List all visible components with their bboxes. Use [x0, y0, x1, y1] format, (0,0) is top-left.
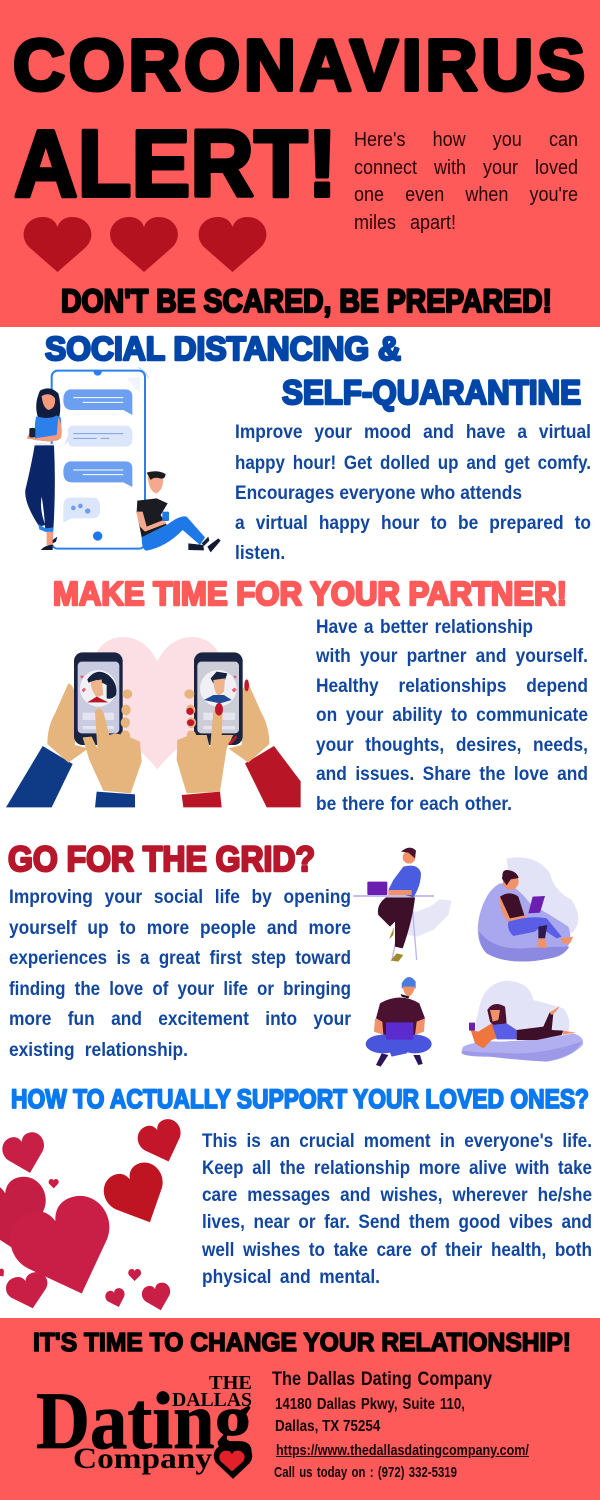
text: contact details: Dallas, TX 75254	[275, 1418, 380, 1434]
text: support body: well wishes to take care of their health, both	[202, 1239, 592, 1261]
heading: don't be scared: DON'T BE SCARED, BE PREPARED!	[61, 283, 552, 319]
text: social distancing body: a virtual happy hour to be prepared to	[235, 512, 591, 534]
text: social distancing body: Improve your mood and have a virtual	[235, 421, 591, 443]
text: contact details: The Dallas Dating Company	[272, 1369, 492, 1390]
text: contact details	[272, 1369, 529, 1481]
text: partner body: your thoughts, desires, needs,	[316, 734, 588, 756]
panel: make time for your partner	[6, 575, 588, 815]
text: intro: Here's how you can	[354, 129, 578, 151]
heading: change your relationship: IT'S TIME TO CHANGE YOUR RELATIONSHIP!	[33, 1329, 571, 1357]
illustration: hands holding phones	[6, 637, 301, 807]
text: grid body: existing relationship.	[9, 1039, 188, 1061]
icon: three hearts	[24, 217, 266, 272]
illustration: floating hearts	[0, 1116, 189, 1314]
text: grid body: finding the love of your life or bringing	[9, 978, 351, 1000]
text: partner body: on your ability to communicate	[316, 704, 588, 726]
text: partner body: with your partner and yourself.	[316, 645, 588, 667]
text: contact details: https://www.thedallasdatingcompany.com/	[276, 1442, 529, 1459]
text: partner body: Have a better relationship	[316, 616, 533, 638]
text: support body: physical and mental.	[202, 1266, 380, 1288]
logo: the dallas dating company: DALLAS	[172, 1389, 252, 1411]
panel: header	[0, 0, 600, 327]
text: social distancing body: Encourages everyone who attends	[235, 482, 522, 504]
title: coronavirus: CORONAVIRUS	[13, 26, 585, 106]
text: contact details: Call us today on : (972) 332-5319	[274, 1464, 457, 1481]
text: partner body: be there for each other.	[316, 793, 512, 815]
text: support body: lives, near or far. Send them good vibes and	[202, 1211, 592, 1233]
heading: make time: MAKE TIME FOR YOUR PARTNER!	[53, 575, 567, 612]
text: support body: Keep all the relationship more alive with take	[202, 1157, 592, 1179]
panel: go for the grid	[8, 839, 583, 1067]
panel: support your loved ones	[0, 1084, 592, 1310]
logo: the dallas dating company: Company	[73, 1442, 212, 1475]
text: support body: care messages and wishes, wherever he/she	[202, 1184, 592, 1206]
illustration: four people on devices	[353, 848, 583, 1067]
panel: social distancing	[25, 330, 591, 564]
text: intro: one even when you're	[354, 184, 578, 206]
text: social distancing body	[235, 421, 591, 564]
text: contact details: 14180 Dallas Pkwy, Suite 110,	[275, 1396, 465, 1412]
text: intro: miles apart!	[354, 212, 456, 234]
text: grid body	[9, 886, 351, 1061]
panel: footer	[0, 1318, 600, 1500]
illustration: phone with people chatting	[25, 367, 221, 552]
text: partner body: and issues. Share the love and	[316, 763, 588, 785]
heading: go for the grid: GO FOR THE GRID?	[8, 839, 315, 879]
text: support body: This is an crucial moment in everyone's life.	[202, 1130, 592, 1152]
text: support body	[202, 1130, 592, 1288]
logo: the dallas dating company: THE	[209, 1372, 252, 1394]
text: grid body: Improving your social life by opening	[9, 886, 351, 908]
text: intro: connect with your loved	[354, 157, 578, 179]
title: alert: ALERT!	[14, 111, 337, 217]
text: grid body: experiences is a great first step toward	[9, 947, 351, 969]
logo: the dallas dating company: Dating	[36, 1375, 252, 1466]
text: grid body: more fun and excitement into your	[9, 1008, 351, 1030]
heading: social distancing: SOCIAL DISTANCING &	[45, 330, 401, 367]
text: social distancing body: listen.	[235, 542, 285, 564]
text: grid body: yourself up to more people and more	[9, 917, 351, 939]
text: social distancing body: happy hour! Get dolled up and get comfy.	[235, 452, 591, 474]
text: intro	[354, 129, 578, 234]
text: partner body: Healthy relationships depend	[316, 675, 588, 697]
text: partner body	[316, 616, 588, 815]
